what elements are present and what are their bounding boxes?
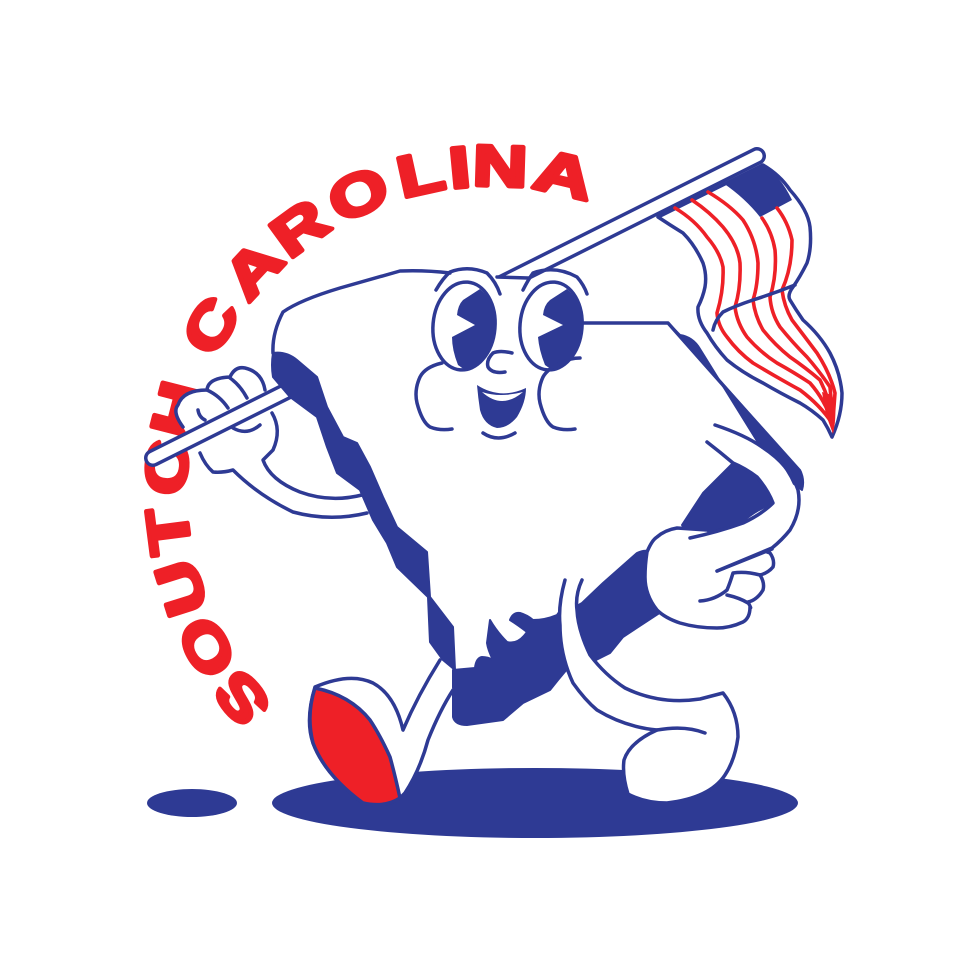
right hand [645, 528, 774, 628]
back leg and shoe [309, 660, 453, 805]
right arm [670, 425, 800, 571]
lower lip [483, 433, 515, 438]
bottom dark edge [453, 600, 568, 725]
curved title: SOUTCH CAROLINA: N [472, 134, 528, 200]
American flag [658, 165, 842, 437]
left eye [429, 279, 499, 373]
curved title: SOUTCH CAROLINA: A [210, 226, 296, 312]
flag red stripes [675, 192, 835, 434]
eyebrows [436, 269, 587, 294]
curved title: SOUTCH CAROLINA: S [201, 658, 283, 738]
curved title: SOUTCH CAROLINA: H [139, 375, 215, 444]
armpit highlight [745, 506, 771, 521]
flag fold [713, 285, 795, 330]
right dark edge [570, 551, 664, 662]
flag canton [723, 165, 792, 217]
cheeks [416, 358, 580, 430]
nose [488, 352, 512, 372]
curved title: SOUTCH CAROLINA: C [170, 286, 253, 366]
curved title: SOUTCH CAROLINA: U [143, 552, 221, 624]
front leg and foot [560, 580, 738, 803]
raised arm and hand holding pole [176, 368, 367, 517]
curved title: SOUTCH CAROLINA: A [528, 136, 600, 213]
curved title: SOUTCH CAROLINA: L [391, 138, 450, 211]
dark edge by flag side [668, 323, 803, 490]
mouth [477, 385, 526, 428]
flag pole [153, 156, 757, 458]
left dark edge [272, 353, 455, 670]
curved title: SOUTCH CAROLINA: C [133, 438, 202, 497]
curved title: SOUTCH CAROLINA: O [165, 605, 250, 688]
curved title: SOUTCH CAROLINA [133, 134, 600, 738]
ground shadow small [147, 789, 237, 817]
finger lines [700, 549, 772, 603]
state top outline [273, 271, 800, 472]
curved title: SOUTCH CAROLINA: O [319, 153, 398, 236]
curved title: SOUTCH CAROLINA: R [259, 186, 341, 271]
curved title: SOUTCH CAROLINA: T [134, 504, 204, 558]
state body [272, 271, 803, 725]
right eye [516, 279, 586, 373]
shoe sole [310, 688, 400, 805]
teeth [482, 392, 523, 401]
ground shadow large [272, 768, 798, 838]
curved title: SOUTCH CAROLINA: I [446, 135, 473, 201]
face [416, 269, 587, 438]
